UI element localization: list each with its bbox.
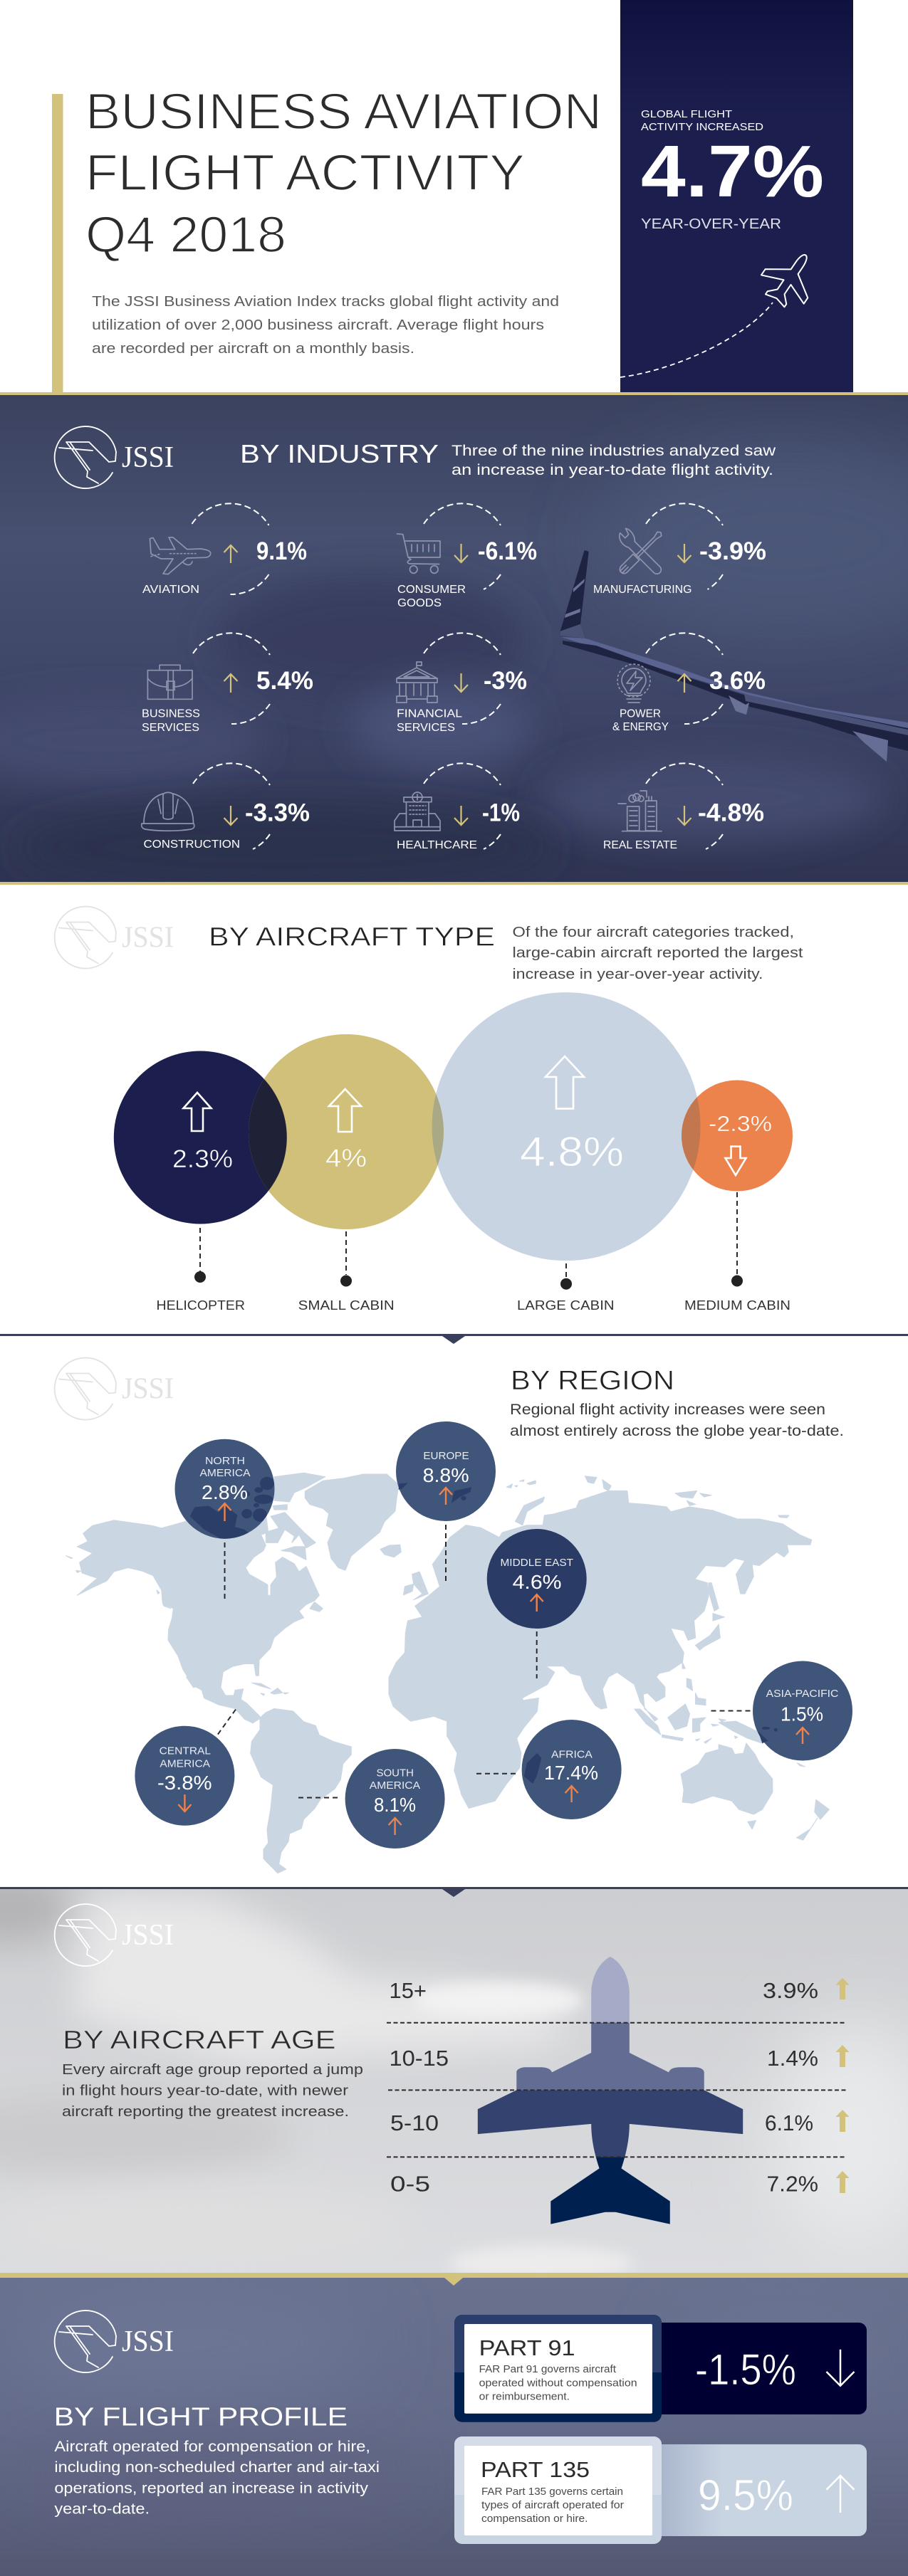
item: real estate	[603, 763, 764, 851]
row: 15+: 15+	[389, 1978, 427, 2003]
airplane silhouette by age band	[478, 1957, 743, 2224]
leader lines	[217, 1525, 753, 1798]
row: 5-10: 6.1%	[765, 2110, 813, 2135]
gold divider with notch	[0, 2273, 908, 2286]
gold divider under industry	[0, 882, 908, 885]
bubble: middle east: MIDDLE EAST	[500, 1557, 573, 1569]
card: part 135: PART 135	[481, 2457, 590, 2482]
logo	[55, 426, 174, 488]
row: 0-5: 0-5	[390, 2172, 430, 2197]
logo	[55, 2310, 174, 2372]
icon: hospital	[395, 792, 440, 831]
item: construction	[142, 763, 310, 851]
bubble: asia-pacific: ASIA-PACIFIC	[766, 1688, 839, 1700]
item: real estate: -4.8%	[698, 799, 764, 827]
logo	[55, 1358, 174, 1420]
bubble: small cabin: 4%	[325, 1145, 367, 1172]
item: aviation	[142, 503, 307, 596]
description	[54, 2439, 380, 2518]
card: part 91	[454, 2315, 867, 2422]
panel: global increase: 4.7%	[641, 130, 824, 212]
item: business services: SERVICES	[142, 722, 199, 734]
title: BUSINESS AVIATION	[85, 84, 602, 140]
card: part 91: or reimbursement.	[479, 2392, 570, 2403]
item: manufacturing: -3.9%	[699, 537, 766, 565]
icon: airplane with dashed trail	[620, 241, 827, 377]
title: FLIGHT ACTIVITY	[85, 145, 525, 201]
description	[62, 2062, 363, 2120]
gold title bar	[52, 94, 63, 394]
bubble: central america	[135, 1726, 234, 1826]
divider with notch	[0, 1334, 908, 1344]
panel: by aircraft age	[0, 1872, 908, 2281]
bubble: north america: AMERICA	[199, 1467, 251, 1479]
item: manufacturing: MANUFACTURING	[593, 584, 692, 596]
bubble: large cabin	[432, 992, 697, 1310]
card: part 135: 9.5%	[698, 2471, 793, 2520]
icon: shopping cart	[397, 534, 440, 573]
bubble: south america: 8.1%	[374, 1794, 416, 1816]
item: construction: CONSTRUCTION	[144, 838, 240, 851]
row: 10-15: 10-15	[389, 2046, 449, 2071]
bubble: medium cabin: MEDIUM CABIN	[684, 1298, 790, 1313]
icon: bank building	[397, 662, 437, 703]
gold divider under header	[0, 392, 908, 395]
bubble: middle east: 4.6%	[513, 1571, 562, 1593]
bubble: central america: AMERICA	[160, 1758, 210, 1770]
item: aviation: 9.1%	[256, 537, 307, 565]
bubble: north america	[175, 1439, 275, 1540]
description: aircraft reporting the greatest increase.	[62, 2104, 349, 2120]
card: part 91: -1.5%	[695, 2345, 796, 2394]
description: operations, reported an increase in activity	[54, 2481, 369, 2497]
bubble: medium cabin	[682, 1081, 793, 1313]
panel: by flight profile	[0, 2273, 908, 2576]
item: aviation: AVIATION	[142, 584, 199, 596]
card: part 135: types of aircraft operated for	[481, 2500, 624, 2511]
icon: wrench and screwdriver	[616, 527, 666, 577]
icon: hard hat	[142, 792, 194, 831]
arrow	[224, 545, 238, 563]
description: year-to-date.	[54, 2501, 150, 2518]
row: 5-10: 5-10	[390, 2110, 439, 2135]
arrow	[454, 806, 468, 825]
item: financial services	[397, 633, 527, 734]
arrow	[678, 674, 691, 693]
panel: header	[52, 0, 853, 394]
item: financial services: -3%	[484, 667, 527, 695]
panel: by region	[55, 1358, 852, 1873]
row: 0-5	[390, 2171, 849, 2197]
description: increase in year-over-year activity.	[513, 967, 763, 982]
heading: BY FLIGHT PROFILE	[54, 2402, 348, 2432]
bubble: africa: AFRICA	[551, 1748, 593, 1761]
band dividers	[387, 2023, 847, 2157]
icon: light bulb	[617, 664, 650, 703]
item: real estate: REAL ESTATE	[603, 839, 677, 851]
item: consumer goods: CONSUMER	[397, 584, 466, 596]
description: large-cabin aircraft reported the largest	[513, 945, 803, 961]
card: part 91: FAR Part 91 governs aircraft	[479, 2364, 616, 2375]
icon: airplane	[150, 537, 211, 574]
arrow	[224, 806, 238, 825]
bubble: small cabin	[249, 1034, 444, 1313]
item: healthcare	[395, 763, 520, 851]
map: eurasia africa oceania	[389, 1476, 829, 1840]
bubble: helicopter: HELICOPTER	[157, 1298, 245, 1313]
row: 0-5: 7.2%	[766, 2172, 818, 2197]
item: consumer goods: GOODS	[397, 597, 442, 609]
divider with notch	[0, 1887, 908, 1897]
item: power and energy: POWER	[620, 708, 661, 720]
description: Regional flight activity increases were seen	[510, 1402, 825, 1418]
bubble: central america: -3.8%	[157, 1772, 212, 1794]
intro text: The JSSI Business Aviation Index tracks global flight activity and	[92, 293, 559, 310]
panel: global increase: YEAR-OVER-YEAR	[641, 216, 781, 232]
description: Aircraft operated for compensation or hire,	[54, 2439, 370, 2455]
cloud background	[0, 2278, 908, 2576]
heading: BY AIRCRAFT AGE	[63, 2025, 335, 2054]
description: in flight hours year-to-date, with newer	[62, 2083, 348, 2099]
description: Three of the nine industries analyzed saw	[452, 443, 776, 459]
item: healthcare: -1%	[482, 799, 520, 827]
row: 15+: 3.9%	[763, 1978, 818, 2003]
panel: by aircraft type	[55, 907, 803, 1313]
bubble: helicopter	[114, 1051, 287, 1313]
item: consumer goods: -6.1%	[478, 537, 537, 565]
intro text	[92, 293, 559, 357]
panel: global increase: GLOBAL FLIGHT	[641, 109, 732, 120]
intro text: are recorded per aircraft on a monthly basis.	[92, 340, 414, 357]
card: part 91: PART 91	[479, 2335, 575, 2360]
description: Of the four aircraft categories tracked,	[513, 925, 794, 940]
card: part 135: compensation or hire.	[481, 2513, 588, 2525]
row: 10-15	[389, 2045, 849, 2071]
bubble: africa	[522, 1720, 622, 1819]
panel: by industry	[0, 395, 908, 890]
bubble: central america: CENTRAL	[160, 1745, 211, 1757]
item: financial services: SERVICES	[397, 722, 455, 734]
arrow	[678, 806, 691, 825]
map: americas and greenland	[66, 1473, 401, 1873]
logo: JSSI	[122, 441, 174, 474]
cloud background	[0, 395, 908, 890]
description: Every aircraft age group reported a jump	[62, 2062, 363, 2078]
item: construction: -3.3%	[245, 799, 310, 827]
row: 5-10	[390, 2110, 849, 2135]
item: power and energy: & ENERGY	[612, 721, 669, 733]
item: power and energy	[612, 633, 766, 733]
map patches under bubble	[190, 1477, 274, 1540]
bubble: europe	[396, 1421, 496, 1521]
heading: BY INDUSTRY	[240, 439, 439, 468]
bubble: south america: SOUTH	[376, 1767, 414, 1779]
bubble: helicopter: 2.3%	[172, 1145, 233, 1173]
description: an increase in year-to-date flight activity.	[452, 462, 773, 478]
item: consumer goods	[397, 503, 537, 609]
title	[85, 84, 602, 263]
logo	[55, 907, 174, 969]
description	[510, 1402, 844, 1439]
bubble: south america: AMERICA	[370, 1779, 420, 1792]
cloud background	[0, 1872, 908, 2281]
row: 15+	[389, 1978, 849, 2003]
intro text: utilization of over 2,000 business aircraft. Average flight hours	[92, 317, 544, 333]
description: almost entirely across the globe year-to-date.	[510, 1423, 844, 1439]
item: manufacturing	[593, 503, 766, 596]
arrow	[224, 674, 238, 693]
item: power and energy: 3.6%	[709, 667, 766, 695]
description: including non-scheduled charter and air-taxi	[54, 2459, 380, 2476]
bubble: asia-pacific	[753, 1661, 852, 1761]
description	[513, 925, 803, 982]
arrow	[454, 544, 468, 562]
logo: JSSI	[122, 1372, 174, 1405]
title: Q4 2018	[85, 207, 286, 263]
description	[452, 443, 776, 478]
bubble: north america: 2.8%	[202, 1481, 248, 1503]
item: financial services: FINANCIAL	[397, 708, 462, 720]
arrow	[454, 673, 468, 692]
bubble: large cabin: 4.8%	[520, 1129, 624, 1175]
heading: BY AIRCRAFT TYPE	[209, 922, 495, 951]
item: business services	[142, 633, 313, 734]
bubble: large cabin: LARGE CABIN	[517, 1298, 614, 1313]
bubble: asia-pacific: 1.5%	[781, 1703, 823, 1725]
item: business services: 5.4%	[256, 667, 313, 695]
card: part 135	[454, 2436, 867, 2544]
logo	[55, 1904, 174, 1966]
bubble: africa: 17.4%	[544, 1762, 598, 1784]
row: 10-15: 1.4%	[767, 2046, 818, 2071]
bubble: europe: 8.8%	[423, 1464, 469, 1486]
aircraft wing	[560, 550, 908, 762]
panel: global increase: ACTIVITY INCREASED	[641, 122, 763, 133]
bubble: europe: EUROPE	[423, 1450, 469, 1462]
arrow	[678, 544, 691, 562]
item: business services: BUSINESS	[142, 708, 200, 720]
logo: JSSI	[122, 1919, 174, 1952]
icon: city towers	[618, 791, 662, 831]
bubble: medium cabin: -2.3%	[709, 1111, 772, 1136]
card: part 135: FAR Part 135 governs certain	[481, 2486, 623, 2498]
bubble: small cabin: SMALL CABIN	[298, 1298, 395, 1313]
logo: JSSI	[122, 921, 174, 954]
bubble: north america: NORTH	[205, 1455, 245, 1467]
world map	[66, 1473, 829, 1873]
heading: BY REGION	[511, 1366, 674, 1396]
icon: briefcase	[147, 665, 192, 699]
panel: global increase	[620, 0, 853, 393]
logo: JSSI	[122, 2325, 174, 2358]
item: healthcare: HEALTHCARE	[397, 839, 477, 851]
bubble: south america	[345, 1749, 445, 1849]
bubble: middle east	[487, 1529, 587, 1629]
card: part 91: operated without compensation	[479, 2378, 637, 2390]
